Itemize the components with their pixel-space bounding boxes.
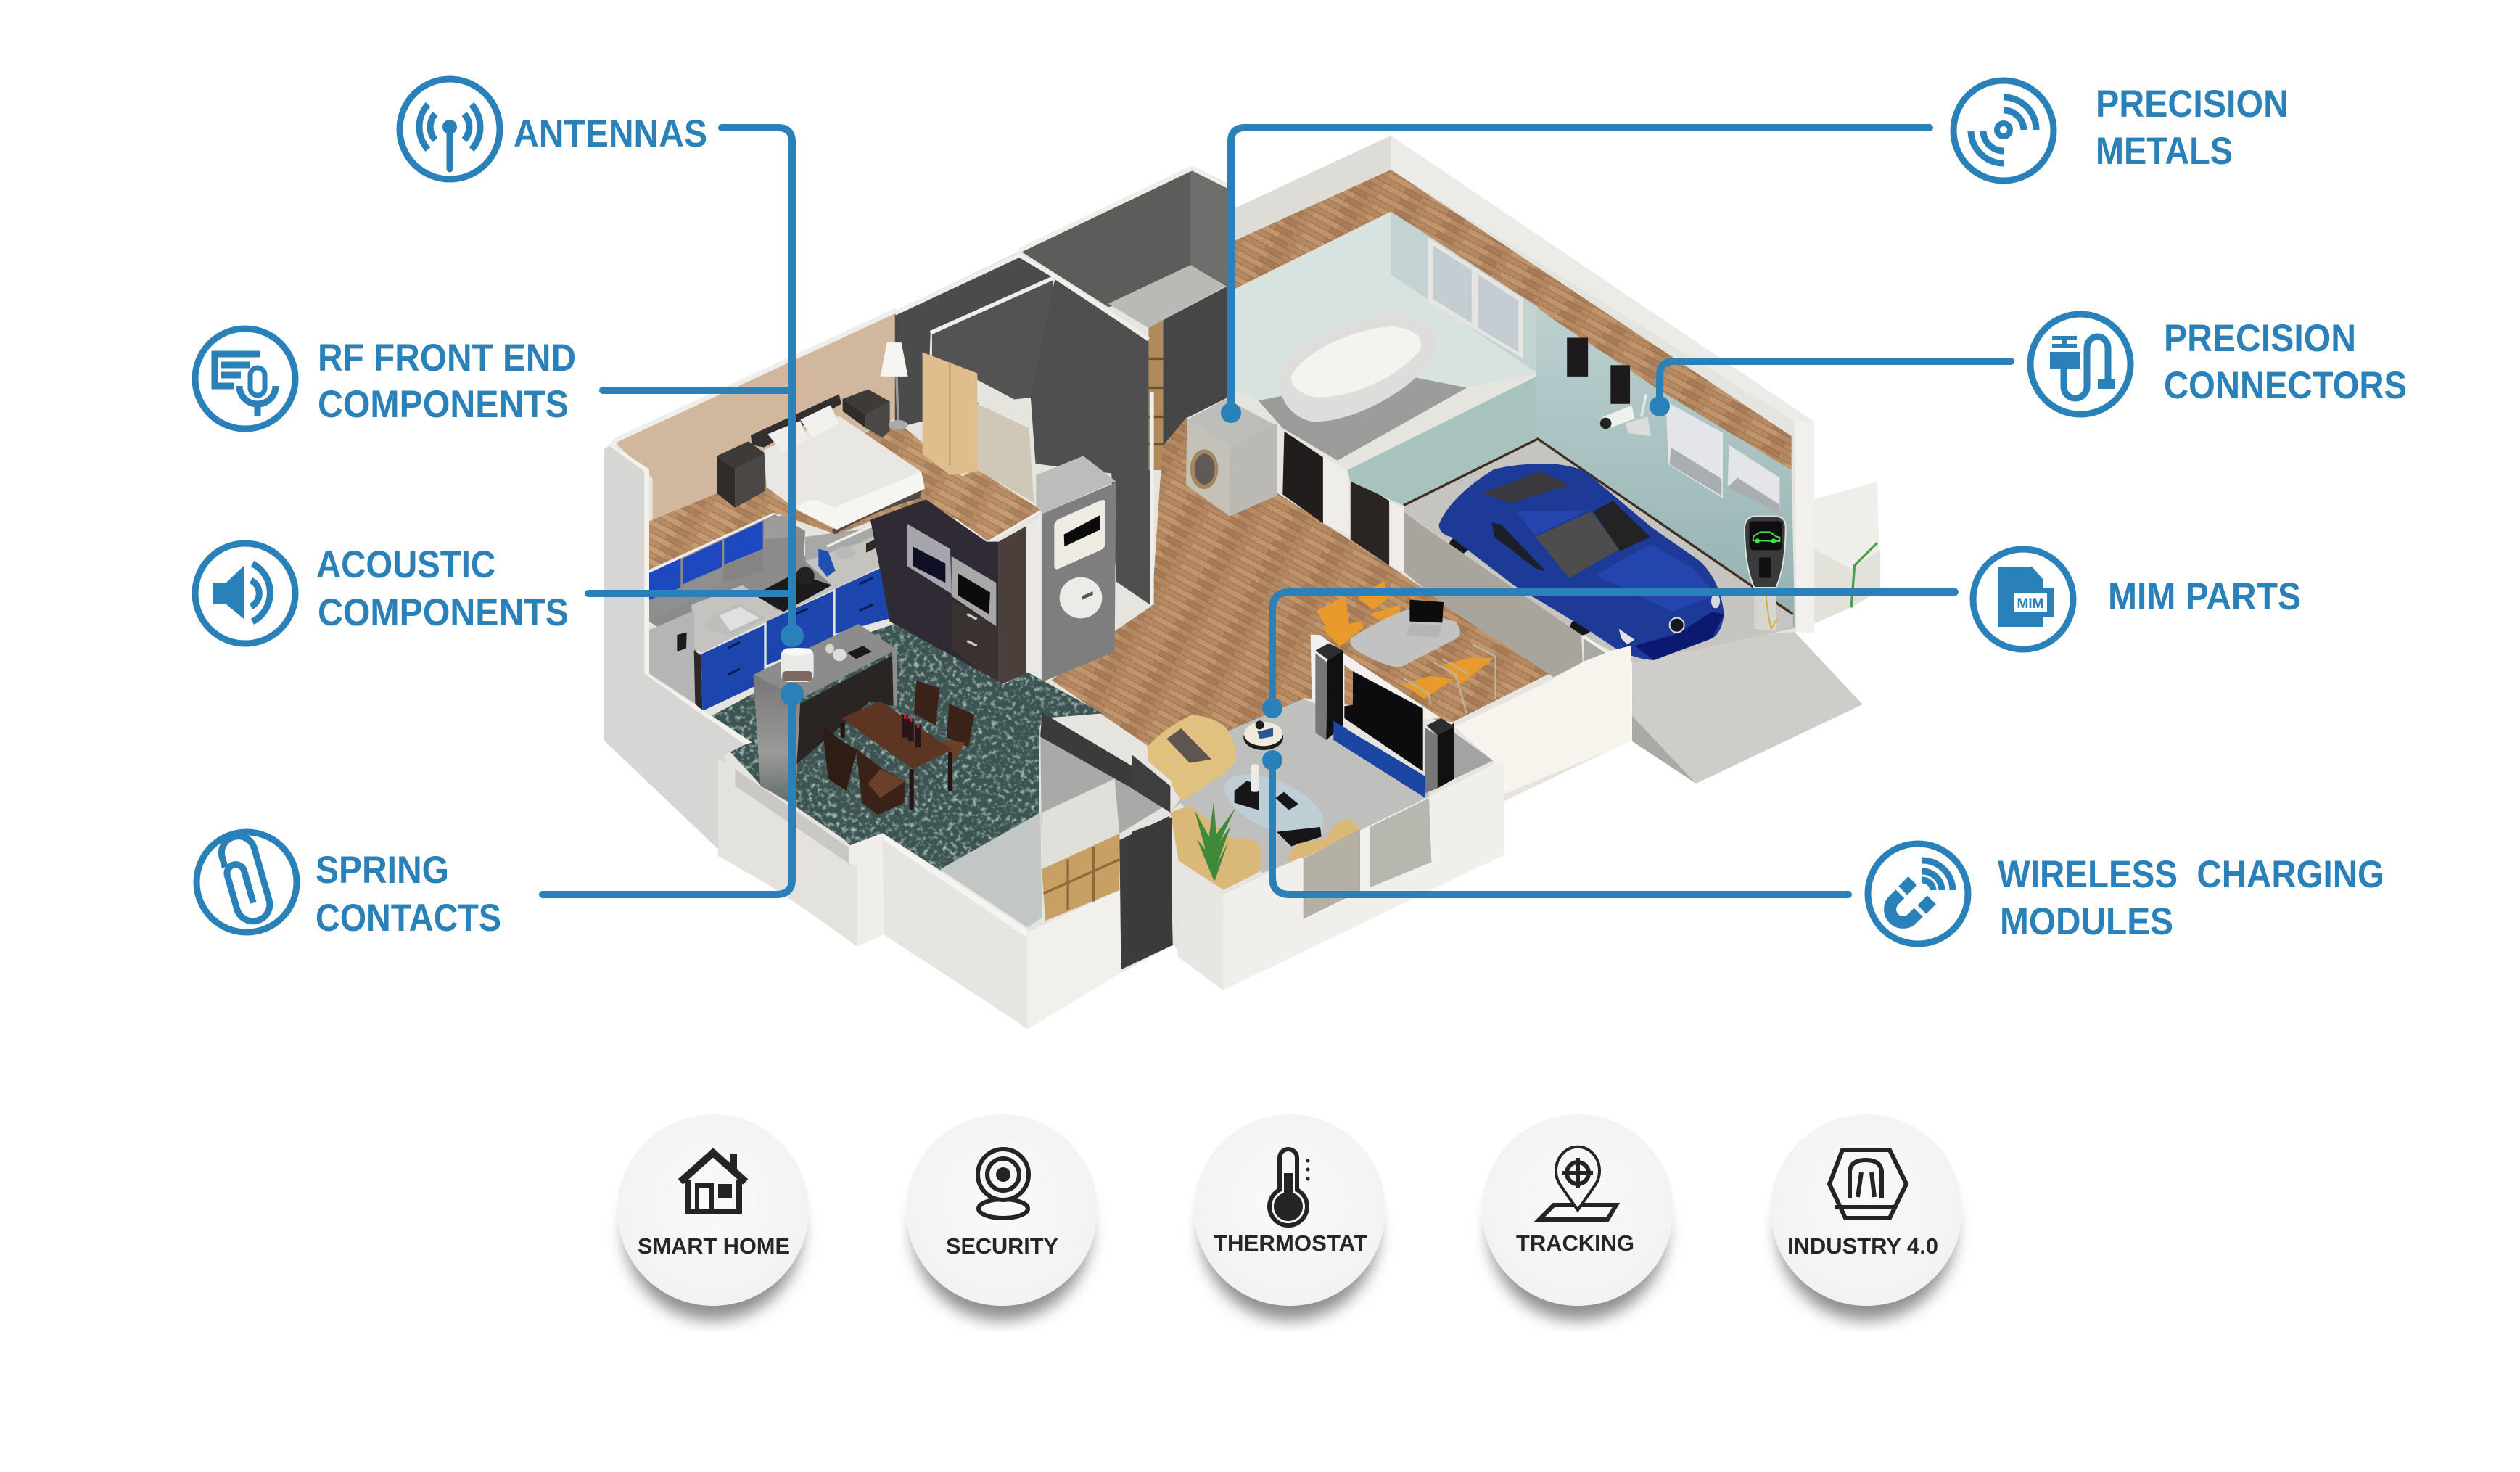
text (2164, 317, 2407, 407)
text (316, 543, 569, 634)
security camera (1600, 394, 1651, 436)
wardrobe (923, 352, 977, 475)
beige partition and AC unit (971, 377, 1034, 503)
wall pictures (1567, 337, 1630, 404)
kitchen island (753, 624, 897, 805)
text: CONTACTS (316, 897, 501, 939)
glass coffee table (1216, 762, 1333, 849)
badge: security (906, 1114, 1098, 1306)
oven cabinet and thermostat column (870, 392, 1154, 686)
precision metals leader (1231, 128, 1930, 413)
label: antennas: ANTENNAS (514, 112, 707, 155)
garage floor (1404, 439, 1793, 662)
dining set (822, 681, 974, 815)
built-in ovens (870, 499, 999, 686)
front wall (1223, 760, 1504, 990)
low divider and closet (940, 712, 1173, 969)
bathroom (1234, 212, 1538, 461)
garage walls (1347, 307, 1795, 628)
marble dining floor (701, 624, 1103, 871)
driveway ramp (1632, 612, 1863, 784)
text: RF FRONT END (318, 337, 576, 379)
left and front exterior walls (604, 445, 1121, 1029)
badge: industry 4.0: INDUSTRY 4.0 (1787, 1233, 1938, 1259)
door (1132, 818, 1172, 958)
living room (1170, 580, 1496, 873)
bed (764, 405, 925, 535)
text: COMPONENTS (318, 591, 569, 634)
text: MODULES (2000, 900, 2173, 943)
table lamp (881, 342, 908, 429)
text (2096, 83, 2289, 173)
icon: MIM file: MIM (2017, 596, 2043, 612)
upper wood strip (1234, 170, 1792, 470)
badge: smart home (617, 1114, 809, 1306)
icon: paper clip (197, 832, 297, 932)
text: COMPONENTS (318, 383, 569, 426)
glazed recesses (1304, 798, 1431, 919)
bedroom floor (649, 423, 1042, 570)
smart speaker device (781, 648, 814, 682)
icon: speaker (195, 543, 295, 644)
text: SPRING (316, 849, 449, 892)
blue car (1438, 464, 1724, 660)
kitchen back wall (649, 514, 902, 651)
plinth wall segments (1282, 432, 1404, 572)
label: MIM parts: MIM PARTS (2108, 575, 2301, 618)
television unit (1311, 635, 1493, 798)
icon: magnet with waves (1868, 844, 1968, 944)
label: acoustic components (195, 543, 569, 644)
icon: factory hexagon (1829, 1150, 1906, 1218)
armchair (1148, 715, 1236, 800)
text (318, 337, 576, 426)
half wall (1404, 511, 1583, 677)
house base (607, 136, 1814, 1029)
badge: smart home: SMART HOME (638, 1233, 790, 1259)
badge: tracking (1482, 1114, 1673, 1306)
island and dining (753, 624, 897, 805)
spring contacts leader (543, 694, 792, 895)
dark partition walls (607, 168, 1231, 606)
label: precision connectors (2030, 314, 2407, 414)
garage floor, car and charger (1404, 401, 1793, 677)
label: spring contacts (197, 832, 501, 939)
icon: map pin (1539, 1147, 1616, 1220)
text (316, 849, 501, 939)
badge: security: SECURITY (946, 1233, 1058, 1259)
MIM parts leader (1272, 592, 1955, 708)
lower blue cabinets (694, 561, 896, 711)
wood floor central (1052, 419, 1549, 747)
living room furniture and front wall (1132, 715, 1504, 990)
living room floor (1170, 699, 1431, 873)
partition end strip (1150, 392, 1154, 606)
text: PRECISION (2164, 317, 2356, 360)
bathtub (1280, 313, 1438, 422)
HVAC thermostat panel (999, 456, 1116, 686)
RF front end leader (603, 387, 791, 394)
text: WIRELESS CHARGING (1998, 853, 2384, 896)
exterior utility box (1814, 482, 1880, 624)
wall below closet (1027, 890, 1121, 1029)
badge: thermostat (1194, 1114, 1385, 1306)
icon: thermometer (1269, 1149, 1310, 1225)
wireless charging leader (1272, 760, 1848, 895)
badge: industry 4.0 (1771, 1114, 1962, 1306)
text (1998, 853, 2384, 943)
front walls (718, 760, 1028, 1028)
robot vacuum (1243, 720, 1283, 750)
label: antennas (400, 79, 707, 179)
text: CONNECTORS (2164, 364, 2407, 407)
acoustic leader (588, 590, 791, 597)
callout lines (543, 128, 2011, 895)
icon: connector plug (2030, 314, 2130, 414)
label: MIM parts (1973, 549, 2301, 649)
label: RF front end components (195, 329, 576, 429)
antennas leader (722, 128, 792, 635)
label: wireless charging modules (1868, 844, 2384, 944)
text: METALS (2096, 130, 2233, 173)
badge shadows (614, 1207, 1966, 1331)
precision connectors leader (1660, 361, 2011, 406)
right wall block (1454, 635, 1631, 798)
icon: house (680, 1153, 746, 1212)
kitchen counter and appliances (691, 531, 902, 653)
badge: tracking: TRACKING (1516, 1230, 1634, 1256)
right wall top edge (1234, 136, 1814, 633)
garage windows (1666, 401, 1779, 513)
icon: RF chip and microphone (195, 329, 295, 429)
low divider cap (1132, 754, 1170, 813)
label: precision metals (1953, 81, 2289, 181)
upper cabinets (649, 515, 887, 620)
icon: security camera (978, 1149, 1029, 1218)
rear sofa (1170, 805, 1261, 890)
icon: MIM file (1973, 549, 2073, 649)
icon: metal disc signal (1953, 81, 2054, 181)
refrigerator (649, 611, 695, 704)
bedroom, kitchen and dining zone (649, 390, 1042, 711)
icon: antenna (400, 79, 500, 179)
badge: thermostat: THERMOSTAT (1214, 1230, 1367, 1256)
text: ACOUSTIC (316, 543, 495, 586)
EV charger (1745, 517, 1786, 631)
left outer wall (604, 445, 752, 856)
left return wall (1177, 865, 1224, 990)
connector dots (781, 396, 1670, 770)
bedroom back wall (615, 312, 929, 525)
washing machine (1186, 399, 1277, 517)
potted plant (1195, 800, 1235, 880)
patio chairs and table (1317, 580, 1496, 713)
headboard and nightstands (717, 390, 890, 508)
front sofa (1288, 818, 1360, 871)
text: PRECISION (2096, 83, 2289, 126)
isometric house cutaway (604, 136, 1880, 1029)
